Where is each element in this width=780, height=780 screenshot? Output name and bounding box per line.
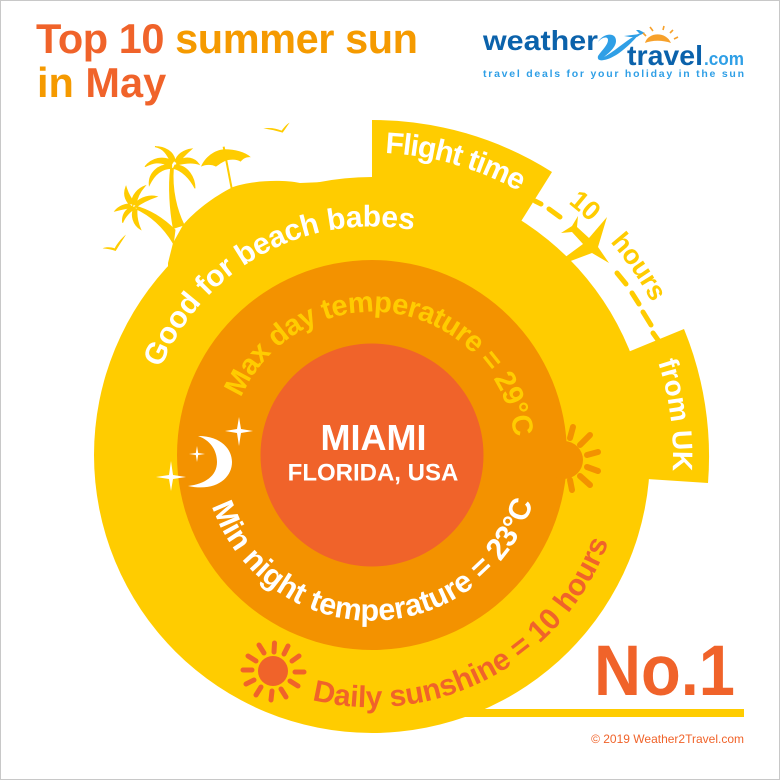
text: from UK: from UK: [658, 358, 692, 471]
text: hours: hours: [611, 230, 662, 300]
icon: sun bottom left: [243, 643, 304, 700]
ranking number: No.1: [594, 632, 735, 711]
sun body: [545, 441, 583, 479]
copyright: © 2019 Weather2Travel.com: [591, 732, 744, 746]
logo wordmark: travel: travel: [627, 40, 703, 71]
star right: [225, 417, 253, 446]
icon: bird upper: [263, 123, 290, 133]
logo: [482, 25, 744, 80]
star left: [156, 461, 186, 491]
sun disc: [258, 656, 288, 686]
icon: large palm: [145, 147, 199, 228]
from UK tab: [628, 329, 709, 483]
moon: [188, 436, 232, 487]
icon: small palm: [115, 186, 175, 243]
small sun at ring edge: [545, 427, 598, 490]
icon: moon and stars: [156, 417, 253, 491]
text: flight time: Flight time: [387, 132, 524, 189]
panel: outer gold disc with hill and flight time tabs: [94, 120, 709, 733]
flight time tab: [372, 120, 552, 223]
outer disc: [94, 177, 650, 733]
logo wordmark: .com: .com: [704, 49, 744, 69]
logo sun: [643, 26, 678, 43]
flight path dashes: [535, 201, 658, 340]
text: 10: 10: [569, 192, 600, 220]
logo tagline: travel deals for your holiday in the sun: [483, 68, 744, 80]
sun rays: [570, 427, 598, 490]
icon: bird lower: [103, 235, 126, 251]
base bar: [463, 709, 744, 717]
text: daily sunshine: Daily sunshine = 10 hours: [314, 538, 607, 714]
panel: centre circle: [260, 344, 484, 566]
panel: mid ring: [177, 260, 567, 650]
text: good for beach babes: Good for beach babes: [145, 204, 414, 364]
hill: [143, 180, 372, 300]
subheading: region: FLORIDA, USA: [288, 460, 458, 486]
logo plane: [624, 30, 645, 37]
sun rays: [243, 643, 304, 700]
title second line: in May: [37, 59, 166, 106]
logo swoosh 2: [598, 33, 640, 60]
heading: city name: MIAMI: [321, 417, 426, 458]
icon: beach umbrella: [201, 149, 251, 167]
text: max day temperature: Max day temperature = 29°C: [224, 296, 533, 436]
beach scene: palms, umbrella and birds: [103, 123, 290, 251]
logo wordmark: weather: weather: [482, 25, 598, 56]
star small: [189, 446, 205, 462]
icon: plane: [561, 216, 609, 263]
text: min night temperature: Min night temperature = 23°C: [212, 498, 531, 627]
title: Top 10 summer sun: [36, 15, 418, 62]
